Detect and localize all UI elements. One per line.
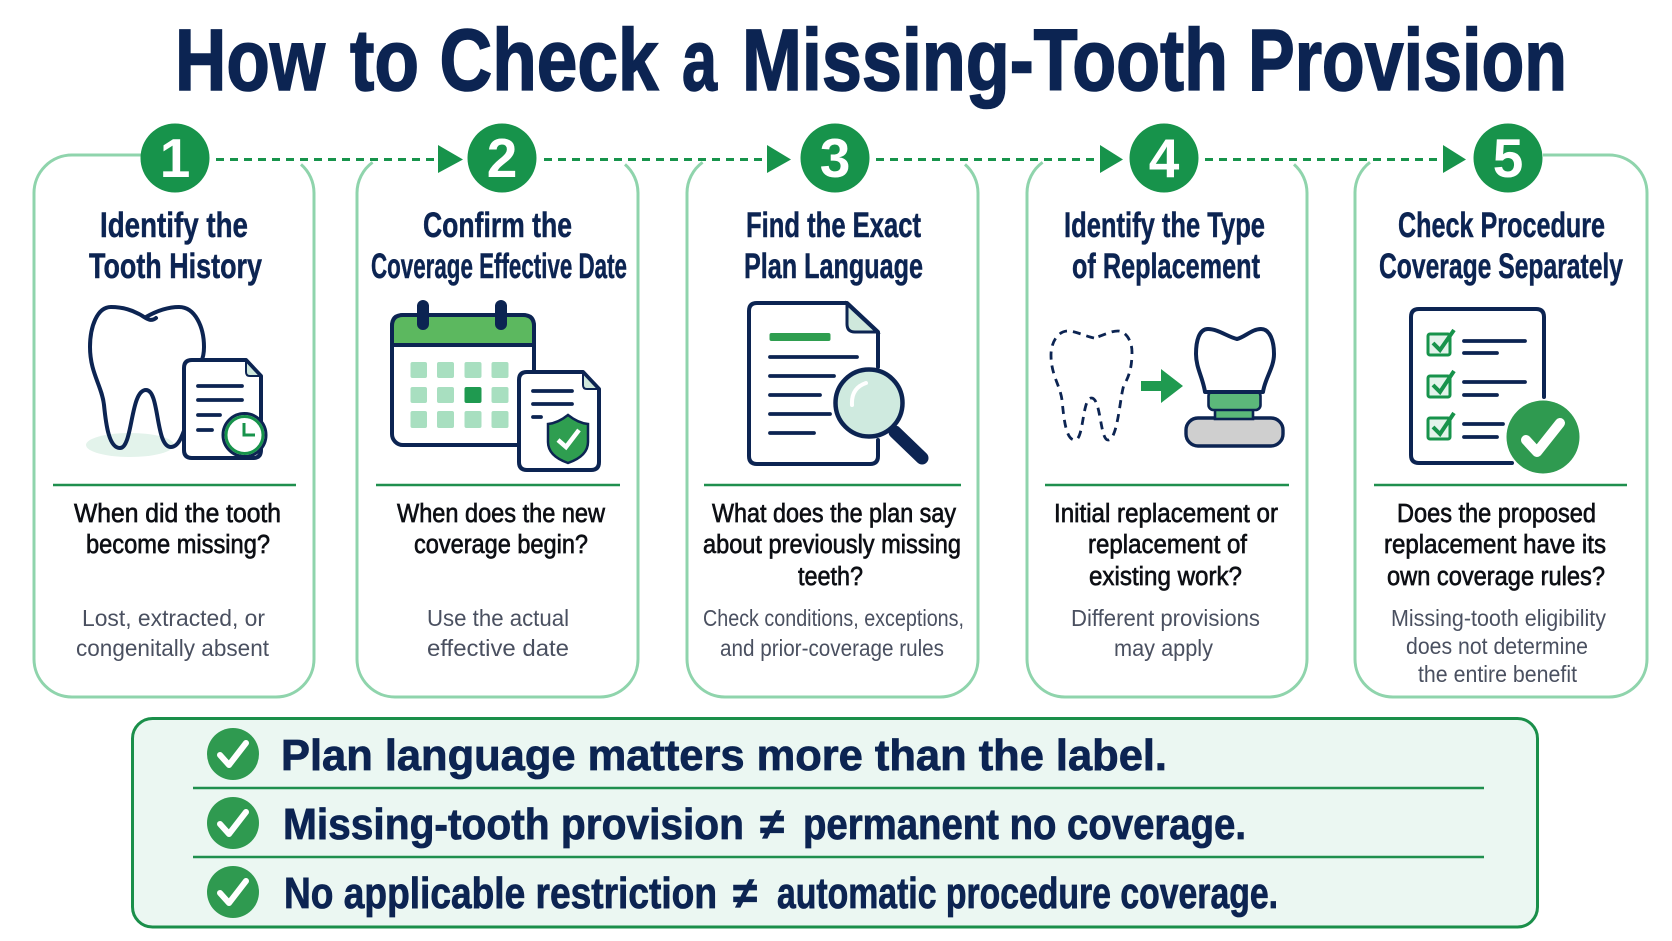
number badge 4: 4 (1149, 127, 1180, 189)
heading 2: Confirm the (423, 206, 572, 245)
icon: document with magnifying glass (749, 303, 922, 464)
number badge 1: 1 (160, 127, 190, 189)
number badge 3 (800, 124, 870, 192)
question 5 (1384, 500, 1606, 591)
number badge 2 (468, 124, 536, 192)
note 1: Lost, extracted, or (82, 605, 265, 631)
takeaway 2 (283, 800, 1246, 849)
number badge 4 (1130, 124, 1198, 192)
card outline 4 (1027, 162, 1307, 697)
note 2 (427, 605, 569, 661)
title: a (682, 12, 717, 109)
number badge 2: 2 (487, 127, 517, 189)
divider 3 (704, 484, 961, 486)
heading 3 (744, 206, 923, 286)
question 3: teeth? (798, 563, 863, 591)
divider 2 (376, 484, 620, 486)
question 3: about previously missing (703, 531, 961, 559)
heading 4 (1064, 206, 1265, 286)
title: Check (440, 12, 659, 109)
question 5: Does the proposed (1397, 500, 1596, 528)
title: Missing-Tooth (742, 12, 1228, 109)
takeaway 1: Plan language matters more than the label. (281, 731, 1167, 780)
title (175, 12, 1567, 109)
takeaway 2: ≠ (760, 800, 784, 849)
note 5: does not determine (1406, 633, 1588, 659)
question 4: existing work? (1089, 563, 1242, 591)
card outline 2 (357, 162, 638, 697)
icon: check 1 (207, 728, 259, 780)
icon: checklist with check badge (1411, 309, 1580, 474)
title: Provision (1248, 12, 1567, 109)
number badge 3: 3 (820, 127, 850, 189)
question 2: coverage begin? (414, 531, 588, 559)
question 3 (703, 500, 961, 591)
icon: missing tooth to crown on implant (1051, 329, 1283, 446)
icon: calendar with shield document (392, 300, 599, 470)
card outline 5 (1355, 155, 1647, 697)
icon: check 2 (207, 797, 259, 849)
question 1: When did the tooth (74, 500, 281, 528)
number badge 1 (140, 124, 210, 192)
takeaway 3 (284, 869, 1278, 918)
takeaway 3: automatic procedure coverage. (777, 869, 1278, 918)
question 5: replacement have its (1384, 531, 1606, 559)
divider 5 (1374, 484, 1627, 486)
panel: key takeaways (132, 718, 1538, 927)
title: How (175, 12, 325, 109)
heading 1: Tooth History (89, 247, 262, 286)
takeaways background (132, 718, 1538, 927)
takeaway 3: ≠ (733, 869, 757, 918)
note 3: and prior-coverage rules (720, 635, 944, 661)
arrow: step 3 to 4 (876, 145, 1123, 173)
panel: step 3 find the exact plan language (687, 124, 978, 697)
takeaway 2: Missing-tooth provision (283, 800, 744, 849)
note 4: may apply (1114, 635, 1213, 661)
question 4: replacement of (1088, 531, 1248, 559)
question 2: When does the new (397, 500, 606, 528)
question 5: own coverage rules? (1387, 563, 1605, 591)
note 1: congenitally absent (76, 635, 270, 661)
heading 3: Plan Language (744, 247, 923, 286)
note 5: Missing-tooth eligibility (1391, 605, 1606, 631)
title: to (350, 12, 419, 109)
note 1 (76, 605, 270, 661)
heading 4: Identify the Type (1064, 206, 1265, 245)
row dividers (193, 788, 1484, 857)
arrow: step 2 to 3 (544, 145, 791, 173)
number badge 5 (1474, 124, 1542, 192)
heading 4: of Replacement (1072, 247, 1260, 286)
panel: step 2 confirm the coverage effective date (357, 124, 638, 697)
divider 1 (53, 484, 296, 486)
heading 3: Find the Exact (746, 206, 921, 245)
heading 2 (371, 206, 627, 286)
note 5: the entire benefit (1418, 661, 1578, 687)
takeaway 2: permanent no coverage. (803, 800, 1246, 849)
number badge 5: 5 (1493, 127, 1523, 189)
note 5 (1391, 605, 1606, 687)
heading 1: Identify the (100, 206, 248, 245)
card outline 1 (34, 155, 314, 697)
heading 1 (89, 206, 262, 286)
heading 5 (1379, 206, 1623, 286)
note 2: effective date (427, 635, 569, 661)
heading 2: Coverage Effective Date (371, 247, 627, 286)
question 2 (397, 500, 606, 559)
panel: step 1 identify the tooth history (34, 124, 314, 697)
note 4: Different provisions (1071, 605, 1260, 631)
question 4 (1054, 500, 1278, 591)
question 1 (74, 500, 281, 559)
note 4 (1071, 605, 1260, 661)
panel: step 4 identify the type of replacement (1027, 124, 1307, 697)
note 3 (703, 605, 964, 661)
icon: check 3 (207, 866, 259, 918)
question 1: become missing? (86, 531, 270, 559)
divider 4 (1045, 484, 1289, 486)
icon: tooth with document and clock (86, 307, 266, 458)
question 4: Initial replacement or (1054, 500, 1278, 528)
card outline 3 (687, 162, 978, 697)
arrow: step 4 to 5 (1205, 145, 1466, 173)
panel: step 5 check procedure coverage separately (1355, 124, 1647, 697)
note 3: Check conditions, exceptions, (703, 605, 964, 631)
question 3: What does the plan say (712, 500, 956, 528)
takeaway 3: No applicable restriction (284, 869, 717, 918)
note 2: Use the actual (427, 605, 569, 631)
arrow: step 1 to 2 (216, 145, 463, 173)
